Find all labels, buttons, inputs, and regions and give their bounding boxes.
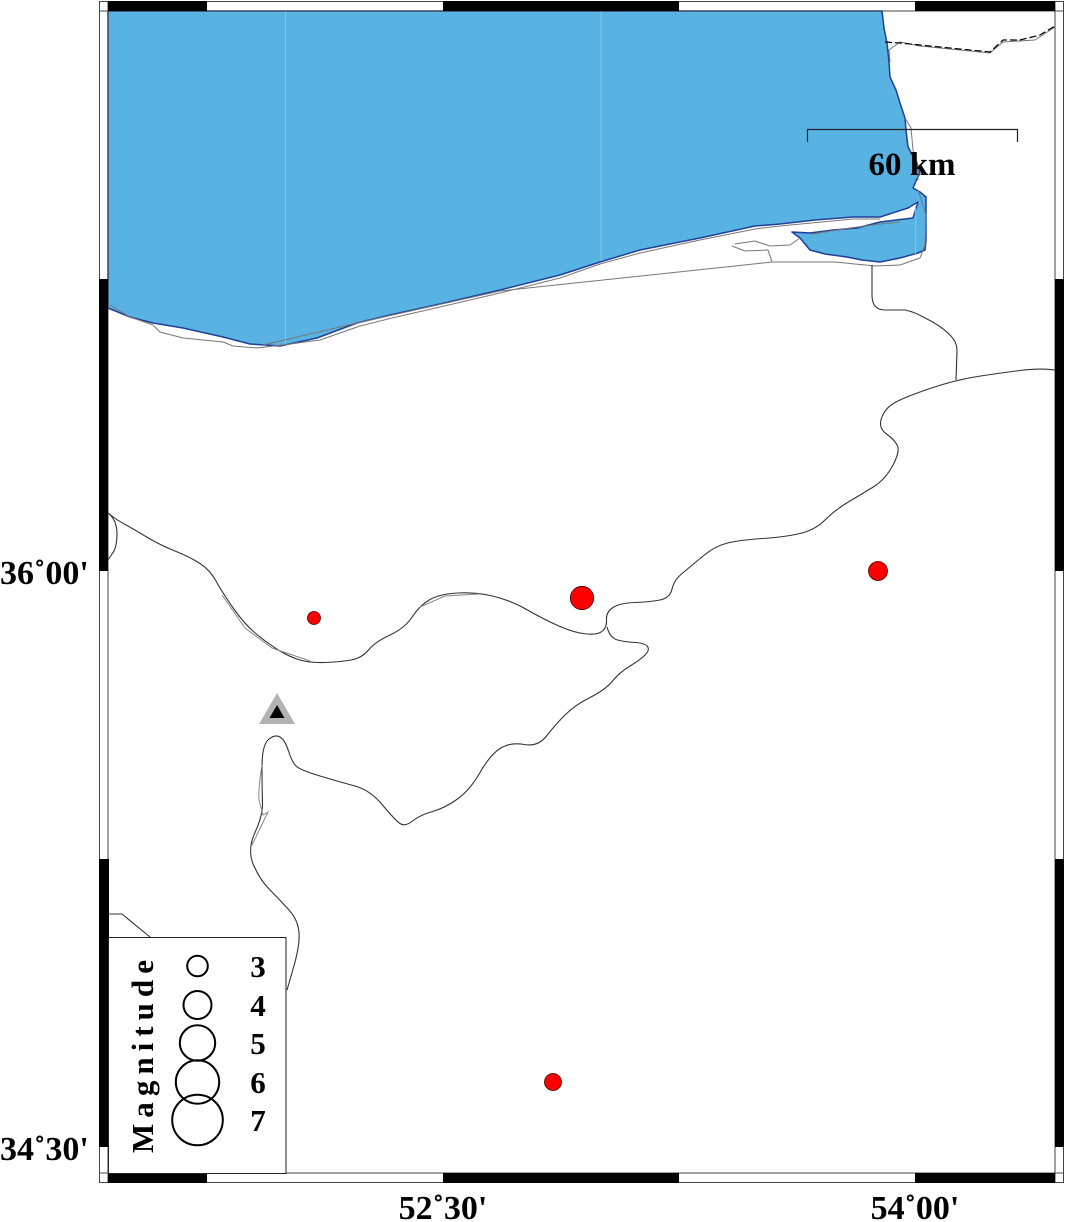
legend labels: 3 [250, 949, 266, 984]
parallel river strands [222, 594, 480, 845]
legend labels: 6 [250, 1065, 266, 1100]
legend title: Magnitude [125, 960, 160, 1153]
station marker triangle [259, 693, 295, 724]
latitude label 36: 36˚00' [0, 555, 89, 592]
legend: magnitude [108, 938, 286, 1174]
legend circles [172, 956, 223, 1145]
earthquake epicentre: east [868, 562, 888, 580]
legend labels: 7 [250, 1103, 266, 1138]
coastline and tributary outlines [110, 27, 1055, 348]
earthquake epicentre: large [570, 586, 594, 610]
scale bar: 60 km [868, 147, 956, 183]
legend labels [250, 949, 266, 1138]
legend labels: 5 [250, 1026, 266, 1061]
earthquake epicentre: south [544, 1074, 562, 1090]
latitude label 34.5: 34˚30' [0, 1131, 89, 1168]
scale bar [808, 130, 1018, 183]
national border: dashed [885, 26, 1055, 52]
sea: Caspian [108, 11, 926, 346]
earthquake epicentre: west [308, 612, 320, 624]
legend labels: 4 [250, 988, 266, 1023]
rivers and province boundaries [108, 265, 1055, 990]
